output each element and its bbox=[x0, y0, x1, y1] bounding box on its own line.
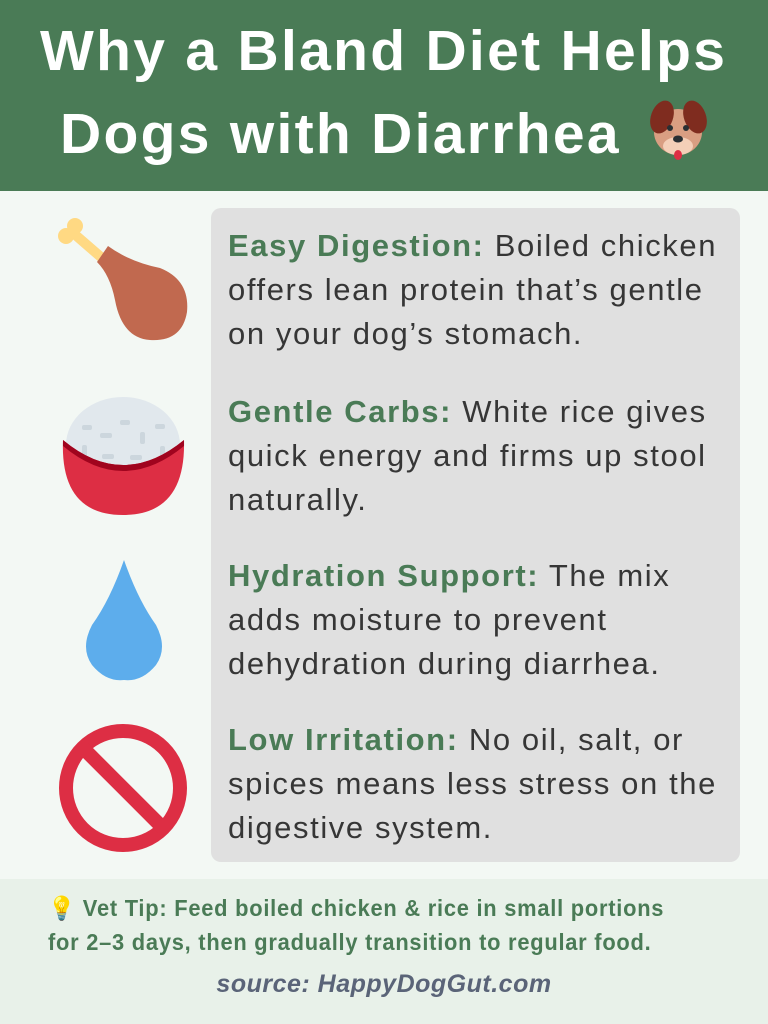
header banner bbox=[0, 0, 768, 191]
icons column bbox=[58, 218, 188, 852]
icon: dog face bbox=[650, 100, 707, 160]
text: easy digestion: Easy Digestion: Boiled chicken bbox=[228, 228, 717, 263]
title bbox=[40, 19, 727, 166]
text: hydration support: Hydration Support: The mix bbox=[228, 558, 670, 593]
vet tip bbox=[48, 895, 664, 955]
text: hydration support: dehydration during diarrhea. bbox=[228, 646, 661, 681]
text: low irritation: Low Irritation: No oil, salt, or bbox=[228, 722, 684, 757]
text: easy digestion bbox=[228, 228, 717, 351]
icon: chicken leg bbox=[58, 218, 187, 340]
text: easy digestion: on your dog’s stomach. bbox=[228, 316, 583, 351]
text: hydration support bbox=[228, 558, 670, 681]
text: easy digestion: offers lean protein that’s gentle bbox=[228, 272, 704, 307]
text: low irritation: digestive system. bbox=[228, 810, 493, 845]
icon: prohibited sign bbox=[66, 731, 180, 845]
footer band bbox=[0, 879, 768, 1024]
text: gentle carbs: naturally. bbox=[228, 482, 368, 517]
vet tip: for 2–3 days, then gradually transition to regular food. bbox=[48, 929, 651, 955]
panel: benefits bbox=[211, 208, 740, 862]
text: hydration support: adds moisture to prevent bbox=[228, 602, 608, 637]
title: Why a Bland Diet Helps bbox=[40, 19, 727, 83]
icon: water drop bbox=[86, 560, 162, 680]
text: gentle carbs bbox=[228, 394, 707, 517]
title: Dogs with Diarrhea bbox=[60, 102, 621, 166]
text: low irritation: spices means less stress on the bbox=[228, 766, 717, 801]
text: gentle carbs: Gentle Carbs: White rice gives bbox=[228, 394, 707, 429]
vet tip: 💡 Vet Tip: Feed boiled chicken & rice in small portions bbox=[48, 895, 664, 921]
icon: rice bowl bbox=[63, 397, 184, 515]
text: gentle carbs: quick energy and firms up stool bbox=[228, 438, 707, 473]
text: low irritation bbox=[228, 722, 717, 845]
source: source: HappyDogGut.com bbox=[216, 970, 552, 998]
